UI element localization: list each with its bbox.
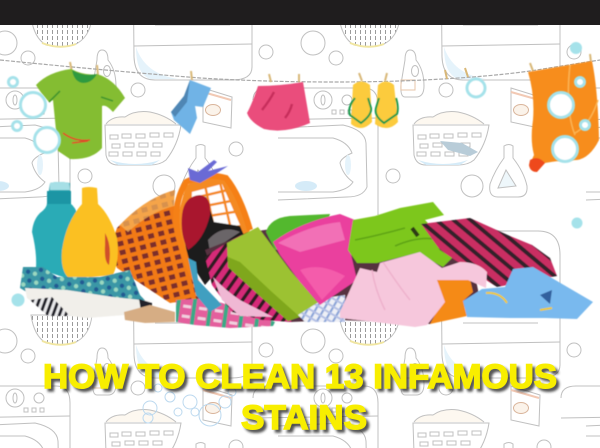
icon: purple clothes peg on basket bbox=[188, 160, 228, 183]
icon: orange cloth on line bbox=[528, 54, 599, 172]
grey smudge on basket bbox=[440, 141, 478, 156]
olive green cloth bbox=[227, 227, 318, 321]
title shadow bbox=[46, 361, 560, 440]
teal scarf bbox=[20, 267, 152, 308]
yellow detergent bottle bbox=[62, 187, 118, 279]
dark underlay of pile bbox=[205, 225, 480, 324]
title text: HOW TO CLEAN 13 INFAMOUS bbox=[43, 358, 557, 396]
orange cloth in pile bbox=[430, 279, 473, 324]
title text: STAINS bbox=[241, 399, 367, 437]
title text bbox=[43, 358, 557, 437]
icon: teal detergent bottle bbox=[32, 182, 77, 280]
icon: blue sunglasses on line bbox=[171, 71, 211, 134]
bright green shirt bbox=[348, 202, 457, 267]
multicoloured pink cloth bbox=[176, 298, 275, 328]
orange plastic basket bbox=[112, 176, 250, 303]
clothesline bbox=[0, 60, 600, 82]
title shadow: HOW TO CLEAN 13 INFAMOUS bbox=[46, 361, 560, 399]
pile of laundry bbox=[20, 160, 593, 328]
striped pink cloth bbox=[205, 232, 292, 322]
blue scarf over basket bbox=[188, 258, 222, 312]
plaid cloth bbox=[298, 295, 345, 322]
soap bubbles bbox=[8, 44, 590, 305]
beige cloth bbox=[124, 305, 175, 323]
light blue shirt bbox=[463, 267, 593, 319]
title shadow: STAINS bbox=[244, 402, 370, 440]
icon: yellow flip flops on line bbox=[349, 73, 398, 128]
title bbox=[43, 358, 560, 440]
dark and red clothes inside basket bbox=[182, 195, 246, 285]
green rounded collar bbox=[266, 214, 330, 250]
white and zebra cloth bbox=[25, 288, 152, 318]
icon: pink skirt on line bbox=[247, 74, 310, 131]
top dark bar bbox=[0, 0, 600, 25]
clothes pegs on line bbox=[445, 68, 468, 79]
magenta shirt bbox=[273, 214, 357, 305]
pale pink towel bbox=[340, 252, 487, 327]
dark striped cloth bbox=[421, 218, 557, 287]
icon: green t-shirt on line bbox=[36, 62, 125, 159]
foam bubbles behind title bbox=[143, 384, 236, 426]
